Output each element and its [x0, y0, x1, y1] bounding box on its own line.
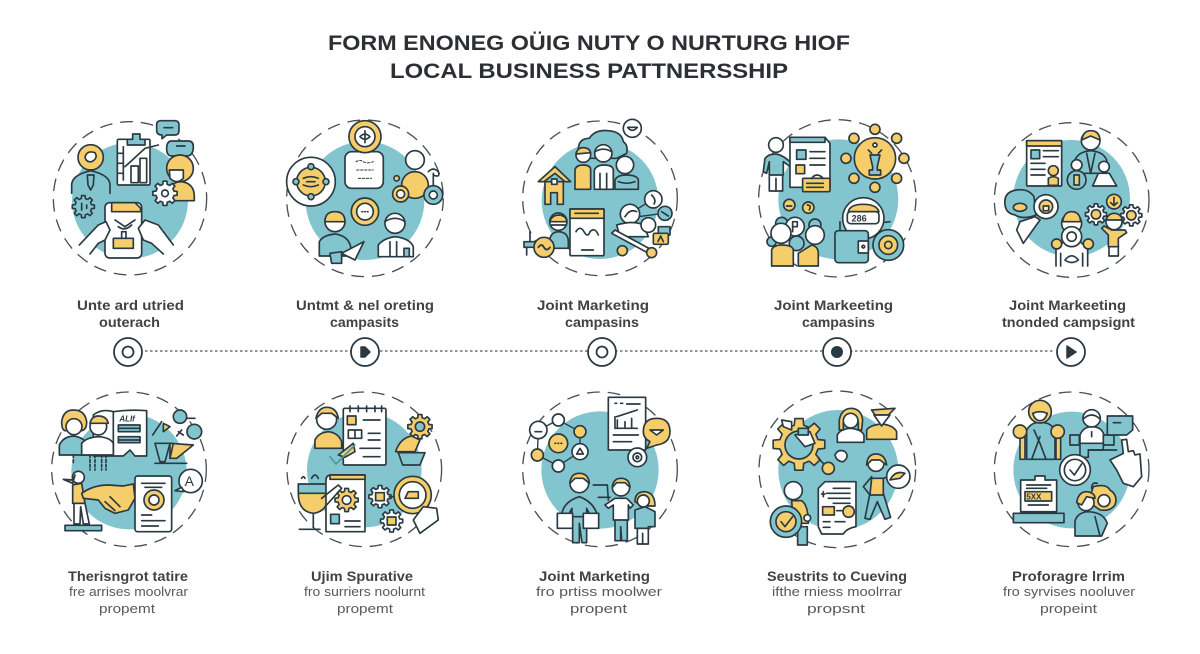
icon: figure with eye	[1052, 212, 1093, 266]
icon: yellow badge and board	[345, 121, 383, 188]
icon: open book	[93, 410, 147, 456]
icon: document	[570, 209, 604, 256]
label: panel 6: propemt	[99, 601, 155, 616]
marker 5	[1057, 338, 1085, 366]
label: panel 7	[304, 568, 425, 616]
icon: speech bubble A	[175, 469, 202, 493]
marker 4	[823, 338, 851, 366]
icon: document with ring	[135, 476, 172, 532]
label: panel 9: Seustrits to Cueving	[767, 568, 907, 584]
label: panel 9: ifthe rniess moolrrar	[772, 584, 903, 599]
icon: smile bubble	[623, 119, 641, 137]
panel: proforma icon	[994, 392, 1149, 547]
label: panel 7: propemt	[337, 601, 393, 616]
label: panel 5: Joint Markeeting	[1009, 297, 1126, 313]
icon: network diagram	[530, 414, 588, 472]
icon: avatar on desk	[1070, 410, 1117, 457]
label: panel 5	[1002, 297, 1135, 330]
icon: two avatars	[837, 408, 897, 442]
icon: cloud	[578, 130, 627, 158]
title	[328, 32, 850, 83]
panel: joint marketing icon	[523, 392, 677, 547]
icon: phone held in hands	[79, 203, 173, 258]
label: panel 2	[296, 297, 434, 330]
icon: person with cloud	[1075, 483, 1116, 536]
icon: person	[63, 471, 102, 531]
icon: small nodes	[818, 451, 847, 474]
icon: group of three	[575, 145, 638, 189]
icon: document with gear	[322, 475, 365, 532]
icon: notebook	[330, 406, 386, 465]
panel: outreach icon	[53, 121, 207, 275]
icon: pointing hand	[1110, 439, 1142, 487]
icon: open book: ALIf	[118, 415, 136, 424]
label: panel 1: Unte ard utried	[77, 297, 184, 313]
icon: crowd	[767, 199, 824, 266]
icon: child	[635, 492, 655, 544]
label: panel 7: fro surriers noolurnt	[304, 584, 425, 599]
icon: handshake	[82, 484, 135, 513]
icon: two people	[59, 410, 113, 470]
panel: partnership icon	[52, 392, 206, 547]
label: panel 6	[68, 568, 189, 616]
label: panel 4	[774, 297, 893, 330]
label: panel 10	[1003, 568, 1136, 616]
label: panel 10: fro syrvises nooluver	[1003, 584, 1136, 599]
label: panel 3	[537, 297, 649, 330]
icon: business person	[72, 145, 110, 193]
icon: person with mask	[315, 407, 342, 448]
icon: white gear	[153, 181, 177, 205]
icon: man with boxes	[557, 473, 599, 543]
icon: target	[628, 448, 647, 467]
label: panel 1: outerach	[99, 314, 160, 330]
label: panel 6: fre arrises moolvrar	[69, 584, 189, 599]
label: panel 7: Ujim Spurative	[311, 568, 413, 584]
icon: middle person	[593, 478, 633, 541]
label: panel 8: Joint Marketing	[539, 568, 650, 584]
panel: campaigns icon 1	[287, 120, 443, 277]
marker 1	[114, 338, 142, 366]
icon: speech bubble A: A	[185, 473, 195, 489]
icon: screen	[1107, 416, 1133, 435]
icon: document	[818, 482, 856, 534]
icon: wallet gauge and coin: 286	[852, 213, 867, 223]
icon: two people talking	[319, 212, 413, 263]
icon: speech bubble	[643, 418, 670, 448]
label: panel 10: Proforagre lrrim	[1012, 568, 1125, 584]
icon: teal gear	[72, 196, 94, 218]
title: LOCAL BUSINESS PATTNERSSHIP	[390, 60, 788, 83]
icon: cloud and magnifier	[1005, 190, 1058, 243]
icon: person with mask	[167, 155, 194, 201]
icon: goblet	[298, 475, 328, 529]
icon: sun badge with chess piece	[841, 124, 909, 192]
icon: person and chair	[524, 213, 568, 257]
panel: campaigns icon 2	[523, 119, 677, 276]
icon: network circle	[287, 157, 335, 206]
panel: customer service icon	[759, 391, 916, 548]
label: panel 4: Joint Markeeting	[774, 297, 893, 313]
panel: campaigns icon 3	[759, 120, 916, 277]
icon: speech badge	[351, 198, 379, 225]
icon: profile document	[1027, 141, 1062, 186]
marker 3	[588, 338, 616, 366]
label: panel 6: Therisngrot tatire	[68, 568, 188, 584]
icon: chair with nodes	[153, 410, 202, 463]
label: panel 2: Untmt & nel oreting	[296, 297, 434, 313]
icon: standing person	[863, 454, 910, 519]
icon: manager with clients	[1067, 131, 1117, 189]
marker 2	[351, 338, 379, 366]
panel: supportive icon	[287, 392, 442, 547]
icon: document and briefcase	[790, 137, 830, 192]
label: panel 3: Joint Marketing	[537, 297, 649, 313]
icon: wallet gauge and coin	[835, 198, 904, 263]
label: panel 2: campasits	[330, 314, 399, 330]
icon: house	[538, 167, 571, 204]
label: panel 1	[77, 297, 184, 330]
icon: large gear with globe	[773, 419, 825, 470]
label: panel 5: tnonded campsignt	[1002, 314, 1135, 330]
icon: check badge	[1060, 455, 1090, 485]
label: panel 9: propsnt	[807, 601, 866, 616]
label: panel 8	[536, 568, 663, 616]
label: panel 3: campasins	[565, 314, 639, 330]
timeline	[114, 338, 1085, 366]
label: panel 8: propent	[570, 601, 627, 616]
icon: person with coins	[393, 151, 443, 204]
label: panel 10: propeint	[1040, 601, 1097, 616]
icon: cart with circles	[612, 191, 672, 258]
panel: campaigns icon 4	[994, 123, 1149, 277]
title: FORM ENONEG OÜIG NUTY O NURTURG HIOF	[328, 32, 850, 55]
icon: speech bubbles	[157, 121, 193, 156]
icon: man with figures	[1013, 400, 1064, 459]
icon: clipboard with tray: 5XX	[1026, 492, 1042, 501]
icon: person with check shield	[770, 482, 811, 545]
icon: gears and magnifier	[369, 476, 438, 533]
icon: gear and basket	[396, 415, 432, 465]
icon: presenter	[763, 138, 792, 191]
icon: report with chart	[608, 397, 646, 450]
icon: clipboard chart	[117, 134, 158, 185]
label: panel 9	[767, 568, 907, 616]
label: panel 8: fro prtiss moolwer	[536, 584, 663, 599]
icon: person with gears	[1085, 194, 1142, 256]
label: panel 4: campasins	[802, 314, 875, 330]
